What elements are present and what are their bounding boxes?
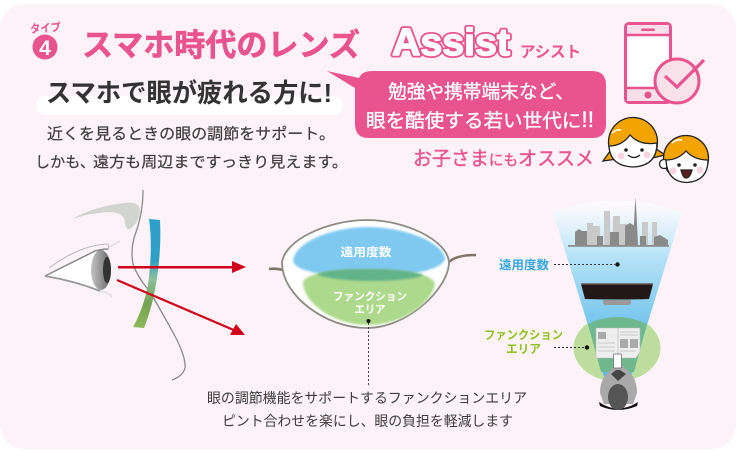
function area ellipse — [574, 314, 660, 382]
caption — [207, 390, 527, 429]
face profile line — [132, 190, 185, 380]
child smiling — [660, 136, 708, 182]
icon: smartphone with check — [626, 24, 704, 103]
frame temples — [449, 255, 476, 262]
type label: タイプ — [30, 21, 62, 36]
label: function area — [484, 328, 563, 356]
diagram: top-down viewing field — [484, 197, 682, 410]
leader: far zone — [554, 262, 620, 267]
far zone label: 遠用度数 — [340, 245, 392, 259]
child with pigtails — [603, 118, 665, 167]
leader: function area — [554, 345, 589, 350]
type number badge: 4 — [39, 37, 51, 60]
lens body — [282, 220, 449, 328]
description text: しかも、 — [35, 154, 95, 171]
lens cross-section — [133, 219, 160, 328]
product name kana: アシスト — [520, 44, 581, 61]
near buildings — [575, 197, 668, 246]
arrow: near view — [117, 280, 245, 335]
person from above — [599, 354, 638, 410]
city skyline — [568, 197, 669, 247]
open newspaper — [596, 328, 640, 358]
function area label: エリア — [354, 303, 386, 316]
subheading with white pill: スマホで眼が疲れる方に! — [46, 78, 332, 108]
diagram: lens front view — [269, 220, 476, 385]
description text: 遠方も周辺まですっきり見えます。 — [93, 154, 348, 171]
eyebrow — [72, 203, 140, 229]
far vision zone — [293, 227, 445, 277]
description text: 近くを見るときの眼の調節をサポート。 — [47, 125, 335, 143]
recommendation for children: お子さまにもオススメ — [413, 148, 594, 170]
product name: Assist — [392, 22, 510, 64]
label: far zone: 遠用度数 — [499, 257, 549, 272]
far buildings — [587, 211, 657, 246]
speech bubble: 眼を酷使する若い世代に !! — [366, 107, 594, 132]
caption: 眼の調節機能をサポートするファンクションエリア — [207, 390, 527, 406]
leader line — [366, 319, 370, 385]
type number badge — [32, 34, 58, 60]
monitor — [581, 283, 653, 305]
diagram: eye side view — [45, 190, 246, 380]
overlap — [588, 317, 647, 372]
main heading: スマホ時代のレンズ — [82, 28, 360, 63]
speech bubble: 勉強や携帯端末など、 — [388, 81, 574, 103]
arrow: distance view — [118, 261, 246, 273]
far vision cone — [553, 200, 682, 380]
function area label — [333, 290, 407, 316]
function area label: ファンクション — [333, 290, 407, 303]
caption: ピント合わせを楽にし、眼の負担を軽減します — [222, 413, 513, 429]
overlap zone — [316, 269, 424, 281]
description text — [35, 125, 348, 171]
icon: two children — [603, 118, 708, 182]
product name: Assist — [392, 22, 510, 64]
eyeball — [45, 241, 120, 297]
label: function area: エリア — [506, 342, 541, 356]
label: function area: ファンクション — [484, 328, 563, 342]
function area — [303, 270, 435, 325]
title block — [30, 21, 581, 64]
speech bubble — [327, 71, 606, 138]
